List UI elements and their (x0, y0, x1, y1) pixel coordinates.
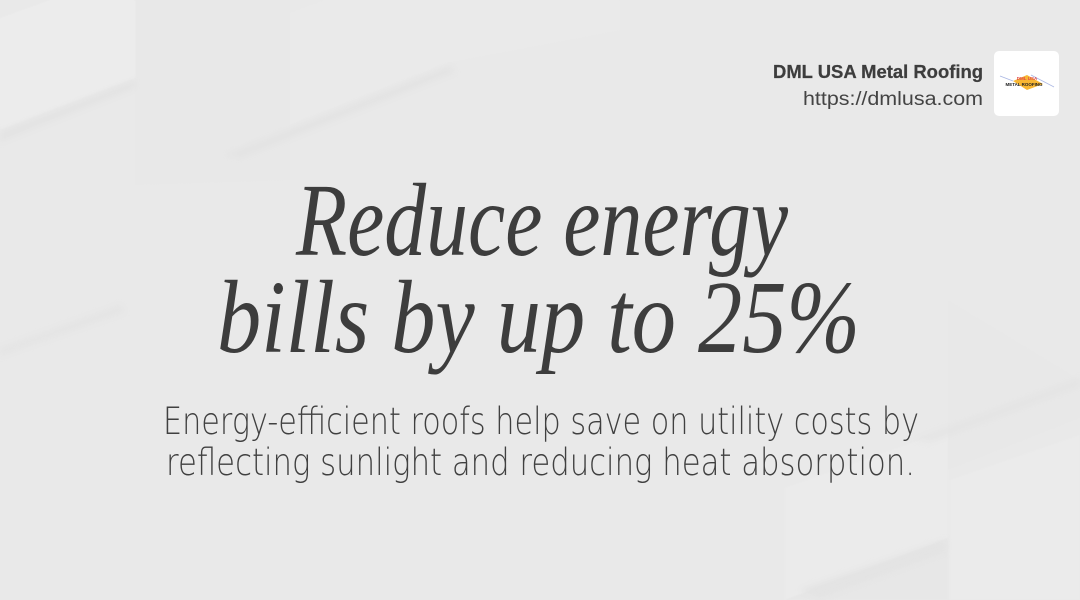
body line 1: Energy-efficient roofs help save on utility costs by (163, 400, 919, 443)
logo text: DML USA (1017, 76, 1038, 81)
headline line 1: Reduce energy (295, 163, 789, 278)
website url: https://dmlusa.com (803, 89, 983, 110)
logo badge: METAL ROOFING (1006, 82, 1043, 88)
icon: orange diamond (1013, 75, 1043, 90)
logo badge (994, 51, 1059, 116)
icon: right roof line (1031, 75, 1054, 87)
body text (163, 400, 919, 484)
body line 2: reflecting sunlight and reducing heat absorption. (166, 441, 915, 484)
brand name: DML USA Metal Roofing (773, 61, 983, 82)
headline line 2: bills by up to 25% (217, 260, 860, 375)
icon: left roof line (1000, 76, 1013, 81)
headline (217, 163, 860, 375)
